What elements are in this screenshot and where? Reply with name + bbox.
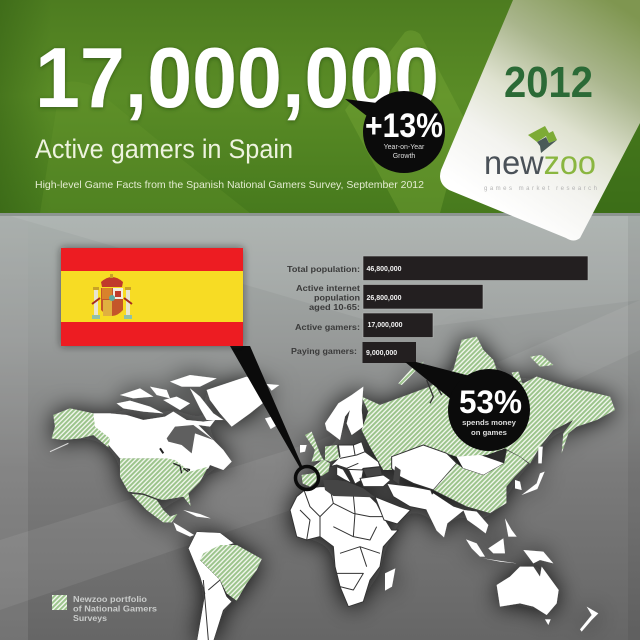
Turkey bbox=[360, 475, 391, 487]
Australia bbox=[497, 567, 559, 615]
Russia bbox=[362, 337, 615, 470]
source line: High-level Game Facts from the Spanish National Gamers Survey, September 2012 bbox=[35, 179, 424, 191]
callout: 53% spends money bbox=[405, 362, 530, 451]
bar: paying gamers: 9,000,000 bbox=[366, 350, 397, 357]
bar: paying gamers: Paying gamers: bbox=[291, 346, 357, 356]
bar: total population: 46,800,000 bbox=[366, 266, 402, 273]
Africa bbox=[290, 487, 398, 607]
coat of arms bbox=[92, 274, 132, 319]
Mexico bbox=[132, 494, 177, 522]
subtitle: Active gamers in Spain bbox=[35, 134, 293, 164]
world map bbox=[50, 337, 615, 640]
Hudson Bay bbox=[167, 425, 213, 453]
flag pointer bbox=[230, 346, 303, 468]
South America bbox=[188, 532, 234, 640]
Italy bbox=[337, 467, 352, 483]
Iceland bbox=[265, 417, 277, 429]
bar: active internet population: population bbox=[314, 292, 360, 302]
Lake borders bbox=[173, 463, 188, 473]
Tasmania bbox=[545, 619, 551, 625]
Andean borders bbox=[203, 580, 220, 640]
Indonesia and Philippines bbox=[466, 518, 553, 563]
europe bbox=[300, 387, 401, 497]
legend text: Surveys bbox=[73, 613, 107, 623]
callout: +13% growth: +13% bbox=[365, 107, 443, 145]
bar: active internet population: Active internet bbox=[296, 283, 360, 293]
New Zealand bbox=[580, 607, 598, 632]
Brazil bbox=[200, 545, 262, 601]
callout: 53% spends money: on games bbox=[471, 428, 507, 437]
bar: active internet population: 26,800,000 bbox=[366, 295, 402, 302]
spain locator circle bbox=[296, 466, 318, 490]
Africa borders bbox=[300, 488, 383, 590]
Arabia bbox=[375, 497, 411, 524]
Scandinavia bbox=[325, 387, 363, 440]
Greenland bbox=[207, 377, 267, 427]
Ireland bbox=[300, 445, 307, 453]
spanish flag bbox=[61, 248, 243, 346]
France bbox=[313, 459, 330, 476]
Canada bbox=[93, 412, 232, 475]
africa, asia, oceania bbox=[290, 337, 615, 632]
Central Asia bbox=[392, 445, 457, 490]
legend text: of National Gamers bbox=[73, 604, 157, 614]
Balkans bbox=[348, 469, 363, 484]
header band bbox=[0, 0, 640, 213]
Mongolia bbox=[457, 455, 504, 475]
logo icon bbox=[528, 126, 557, 153]
Caspian Sea bbox=[393, 466, 401, 484]
grey map background bbox=[0, 213, 640, 640]
Central America and Caribbean bbox=[173, 510, 211, 537]
Korea bbox=[515, 480, 522, 490]
logo wordmark: newzoo bbox=[484, 144, 596, 181]
legend text: Newzoo portfolio bbox=[73, 594, 147, 604]
newzoo logo bbox=[484, 126, 597, 192]
Arctic islands bbox=[117, 375, 223, 420]
Black Sea bbox=[363, 467, 382, 477]
China bbox=[433, 450, 528, 513]
USA bbox=[120, 458, 208, 506]
bar: active internet population: aged 10-65: bbox=[309, 302, 360, 312]
bar chart: population funnel bbox=[287, 256, 588, 363]
bar: total population bbox=[287, 256, 588, 280]
Alaska bbox=[52, 408, 110, 447]
logo panel bbox=[440, 0, 640, 240]
India bbox=[423, 493, 464, 537]
Japan bbox=[522, 472, 545, 495]
callout: +13% growth: Year-on-Year bbox=[384, 144, 425, 151]
Spain bbox=[302, 473, 318, 487]
Iran and neighbours bbox=[387, 483, 433, 510]
Southeast Asia bbox=[463, 510, 488, 533]
logo tagline: games market research bbox=[484, 186, 597, 192]
bar: paying gamers bbox=[291, 342, 416, 363]
Germany bbox=[325, 445, 339, 462]
bar: active gamers: Active gamers: bbox=[295, 322, 360, 332]
UK bbox=[305, 432, 323, 462]
Aleutians bbox=[50, 443, 68, 452]
Madagascar bbox=[385, 568, 395, 591]
Great Lakes bbox=[160, 448, 190, 473]
bar: active gamers: 17,000,000 bbox=[368, 322, 403, 329]
north america north bbox=[93, 375, 279, 475]
legend swatch bbox=[52, 595, 67, 610]
legend bbox=[52, 594, 159, 623]
americas south bbox=[50, 408, 262, 640]
callout: +13% growth: Growth bbox=[393, 153, 415, 160]
callout: 53% spends money: 53% bbox=[459, 384, 522, 420]
bar: active gamers bbox=[295, 313, 433, 338]
Kara and Barents gaps bbox=[427, 380, 442, 403]
callout: 53% spends money: spends money bbox=[462, 418, 517, 427]
year 2012: 2012 bbox=[504, 57, 593, 106]
bar: total population: Total population: bbox=[287, 264, 360, 274]
headline number: 17,000,000 bbox=[35, 30, 439, 125]
Central and Eastern Europe bbox=[330, 442, 380, 477]
callout: +13% growth bbox=[345, 91, 445, 173]
Mediterranean bbox=[323, 480, 375, 497]
bar: active internet population bbox=[296, 283, 483, 312]
